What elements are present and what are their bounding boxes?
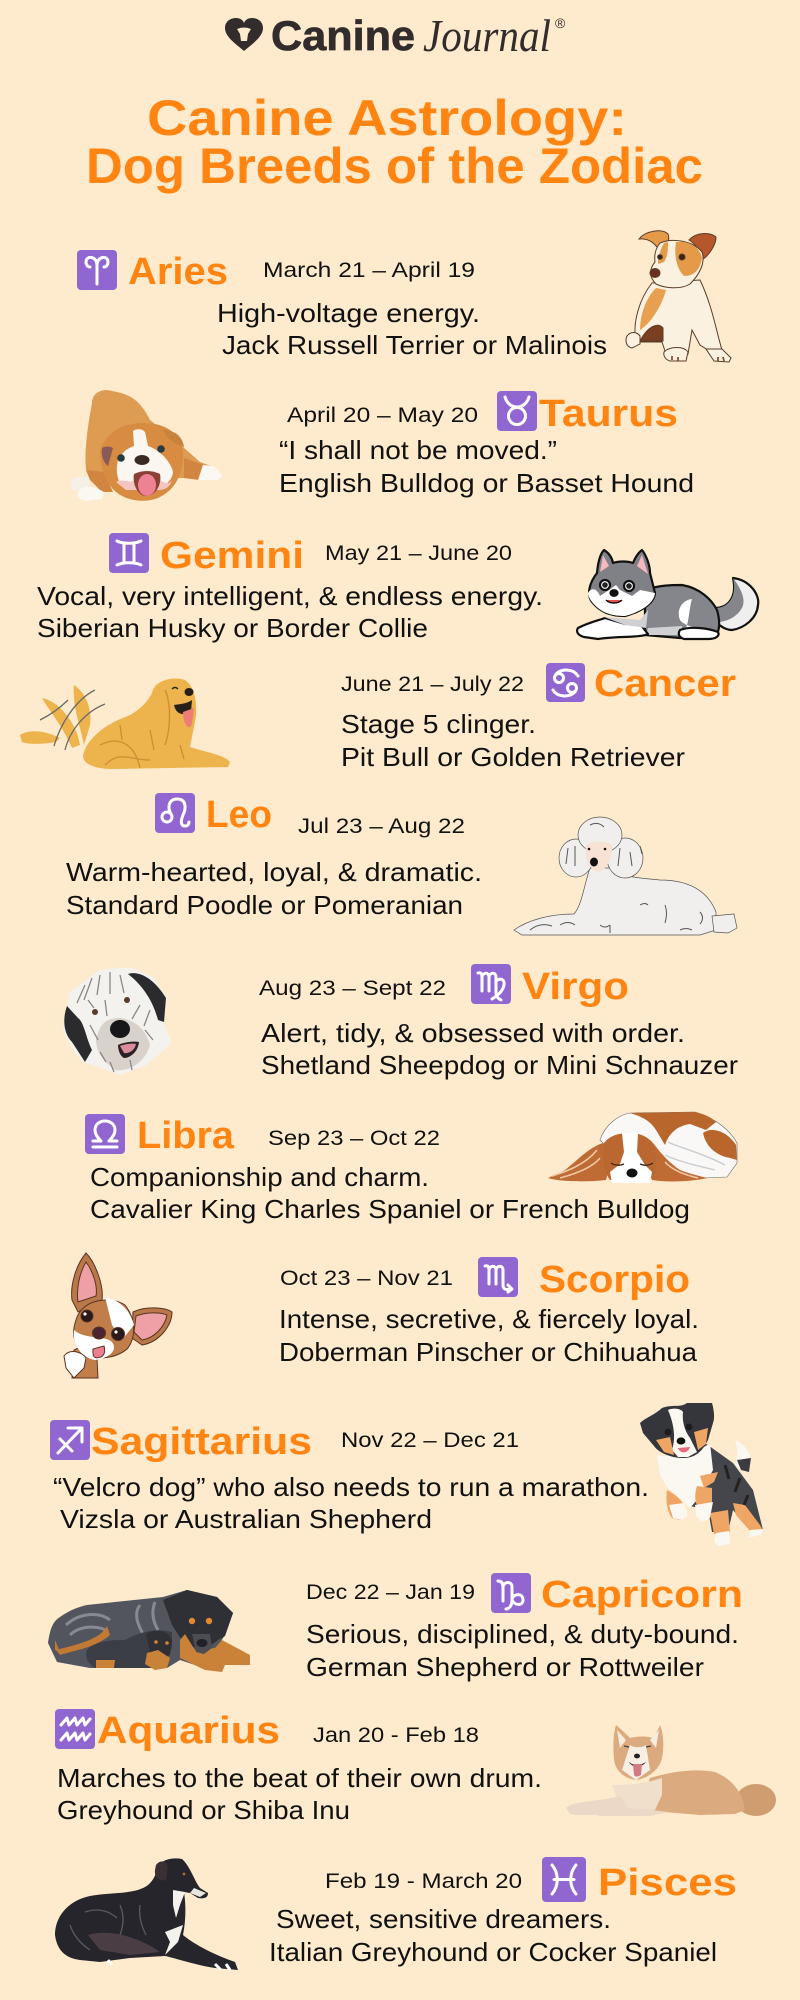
text: Aries trait: High-voltage energy. xyxy=(217,298,480,328)
title xyxy=(86,90,703,194)
illustration: Old English Sheepdog head xyxy=(63,967,172,1075)
panel: Cancer xyxy=(20,663,736,772)
text: Sagittarius breeds: Vizsla or Australian Shepherd xyxy=(60,1504,432,1534)
text: Aries breeds: Jack Russell Terrier or Malinois xyxy=(222,330,607,360)
dates: Virgo: Aug 23 – Sept 22 xyxy=(259,976,446,1000)
icon: Gemini symbol xyxy=(109,533,149,573)
icon: Libra symbol xyxy=(85,1114,125,1154)
heading: Leo: Leo xyxy=(206,794,272,836)
logo: Canine Journal: Canine xyxy=(271,12,415,59)
text: Scorpio breeds: Doberman Pinscher or Chihuahua xyxy=(279,1337,698,1367)
panel: Gemini xyxy=(37,533,758,643)
illustration: Australian Shepherd xyxy=(640,1403,763,1546)
panel: Aries xyxy=(77,231,731,362)
icon: Cancer symbol xyxy=(546,663,585,702)
dates: Aries: March 21 – April 19 xyxy=(263,258,475,282)
text: Libra trait: Companionship and charm. xyxy=(90,1162,429,1192)
text: Taurus trait: “I shall not be moved.” xyxy=(279,435,557,465)
text: Cancer breeds: Pit Bull or Golden Retriever xyxy=(341,742,685,772)
panel: Taurus xyxy=(71,390,694,501)
illustration: Golden Retriever wagging tail xyxy=(20,678,230,769)
illustration: Rottweiler with puppy xyxy=(48,1590,250,1672)
text: Aquarius trait: Marches to the beat of their own drum. xyxy=(57,1763,542,1793)
panel: Virgo xyxy=(63,964,738,1080)
text: Capricorn trait: Serious, disciplined, & duty-bound. xyxy=(306,1619,739,1649)
illustration: Italian Greyhound xyxy=(55,1858,238,1970)
icon: Taurus symbol xyxy=(497,391,537,431)
icon: Aquarius symbol xyxy=(55,1709,95,1749)
illustration: Shiba Inu xyxy=(566,1725,776,1816)
dates: Capricorn: Dec 22 – Jan 19 xyxy=(306,1580,475,1604)
dates: Pisces: Feb 19 - March 20 xyxy=(325,1869,522,1893)
text: Cancer trait: Stage 5 clinger. xyxy=(341,709,536,739)
heading: Virgo: Virgo xyxy=(522,966,629,1008)
dates: Gemini: May 21 – June 20 xyxy=(325,541,512,565)
panel: Libra xyxy=(85,1112,737,1224)
text: Gemini trait: Vocal, very intelligent, & endless energy. xyxy=(37,581,543,611)
text: Gemini breeds: Siberian Husky or Border Collie xyxy=(37,613,428,643)
heading: Sagittarius: Sagittarius xyxy=(91,1421,312,1463)
heading: Aquarius: Aquarius xyxy=(97,1710,280,1752)
title: Canine Astrology: xyxy=(147,90,627,146)
text: Scorpio trait: Intense, secretive, & fiercely loyal. xyxy=(279,1304,699,1334)
logo: Canine Journal xyxy=(225,10,566,61)
heading: Pisces: Pisces xyxy=(598,1862,737,1904)
icon: Sagittarius symbol xyxy=(50,1420,90,1460)
dates: Taurus: April 20 – May 20 xyxy=(287,403,478,427)
dates: Scorpio: Oct 23 – Nov 21 xyxy=(280,1266,453,1290)
text: Leo trait: Warm-hearted, loyal, & dramatic. xyxy=(66,857,482,887)
heading: Aries: Aries xyxy=(128,251,228,293)
illustration: Standard Poodle xyxy=(514,817,737,935)
dates: Cancer: June 21 – July 22 xyxy=(341,672,524,696)
panel: Capricorn xyxy=(48,1573,743,1682)
logo: Canine Journal: Journal xyxy=(423,10,551,61)
illustration: Siberian Husky xyxy=(577,550,758,639)
icon: Scorpio symbol xyxy=(478,1257,518,1297)
text: Pisces breeds: Italian Greyhound or Cocker Spaniel xyxy=(269,1937,717,1967)
illustration: Jack Russell Terrier xyxy=(626,231,731,362)
text: Taurus breeds: English Bulldog or Basset Hound xyxy=(279,468,694,498)
heading: Libra: Libra xyxy=(137,1115,235,1157)
logo: Canine Journal: ® xyxy=(555,15,566,31)
icon: Virgo symbol xyxy=(471,964,511,1004)
text: Virgo breeds: Shetland Sheepdog or Mini Schnauzer xyxy=(261,1050,738,1080)
illustration: English Bulldog xyxy=(71,390,223,501)
panel: Aquarius xyxy=(55,1709,776,1825)
icon: Leo symbol xyxy=(155,793,195,833)
heading: Capricorn: Capricorn xyxy=(541,1574,743,1616)
heading: Cancer: Cancer xyxy=(594,663,736,705)
text: Libra breeds: Cavalier King Charles Spaniel or French Bulldog xyxy=(90,1194,690,1224)
panel: Pisces xyxy=(55,1857,737,1970)
illustration: Cavalier King Charles Spaniel xyxy=(548,1112,737,1183)
dates: Sagittarius: Nov 22 – Dec 21 xyxy=(341,1428,519,1452)
illustration: Chihuahua xyxy=(64,1253,172,1378)
heading: Taurus: Taurus xyxy=(539,393,678,435)
text: Aquarius breeds: Greyhound or Shiba Inu xyxy=(57,1795,350,1825)
text: Sagittarius trait: “Velcro dog” who also needs to run a marathon. xyxy=(53,1472,649,1502)
text: Virgo trait: Alert, tidy, & obsessed with order. xyxy=(261,1018,685,1048)
panel: Sagittarius xyxy=(50,1403,763,1546)
text: Capricorn breeds: German Shepherd or Rottweiler xyxy=(306,1652,704,1682)
dates: Libra: Sep 23 – Oct 22 xyxy=(268,1126,440,1150)
title: Dog Breeds of the Zodiac xyxy=(86,138,703,194)
text: Leo breeds: Standard Poodle or Pomeranian xyxy=(66,890,463,920)
heading: Gemini: Gemini xyxy=(160,535,304,577)
text: Pisces trait: Sweet, sensitive dreamers. xyxy=(276,1904,611,1934)
panel: Scorpio xyxy=(64,1253,699,1378)
icon: Aries symbol xyxy=(77,250,117,290)
dates: Leo: Jul 23 – Aug 22 xyxy=(298,814,465,838)
icon: Pisces symbol xyxy=(542,1857,586,1902)
icon: Capricorn symbol xyxy=(491,1573,531,1613)
heading: Scorpio: Scorpio xyxy=(539,1259,690,1301)
panel: Leo xyxy=(66,793,737,935)
dates: Aquarius: Jan 20 - Feb 18 xyxy=(313,1723,479,1747)
